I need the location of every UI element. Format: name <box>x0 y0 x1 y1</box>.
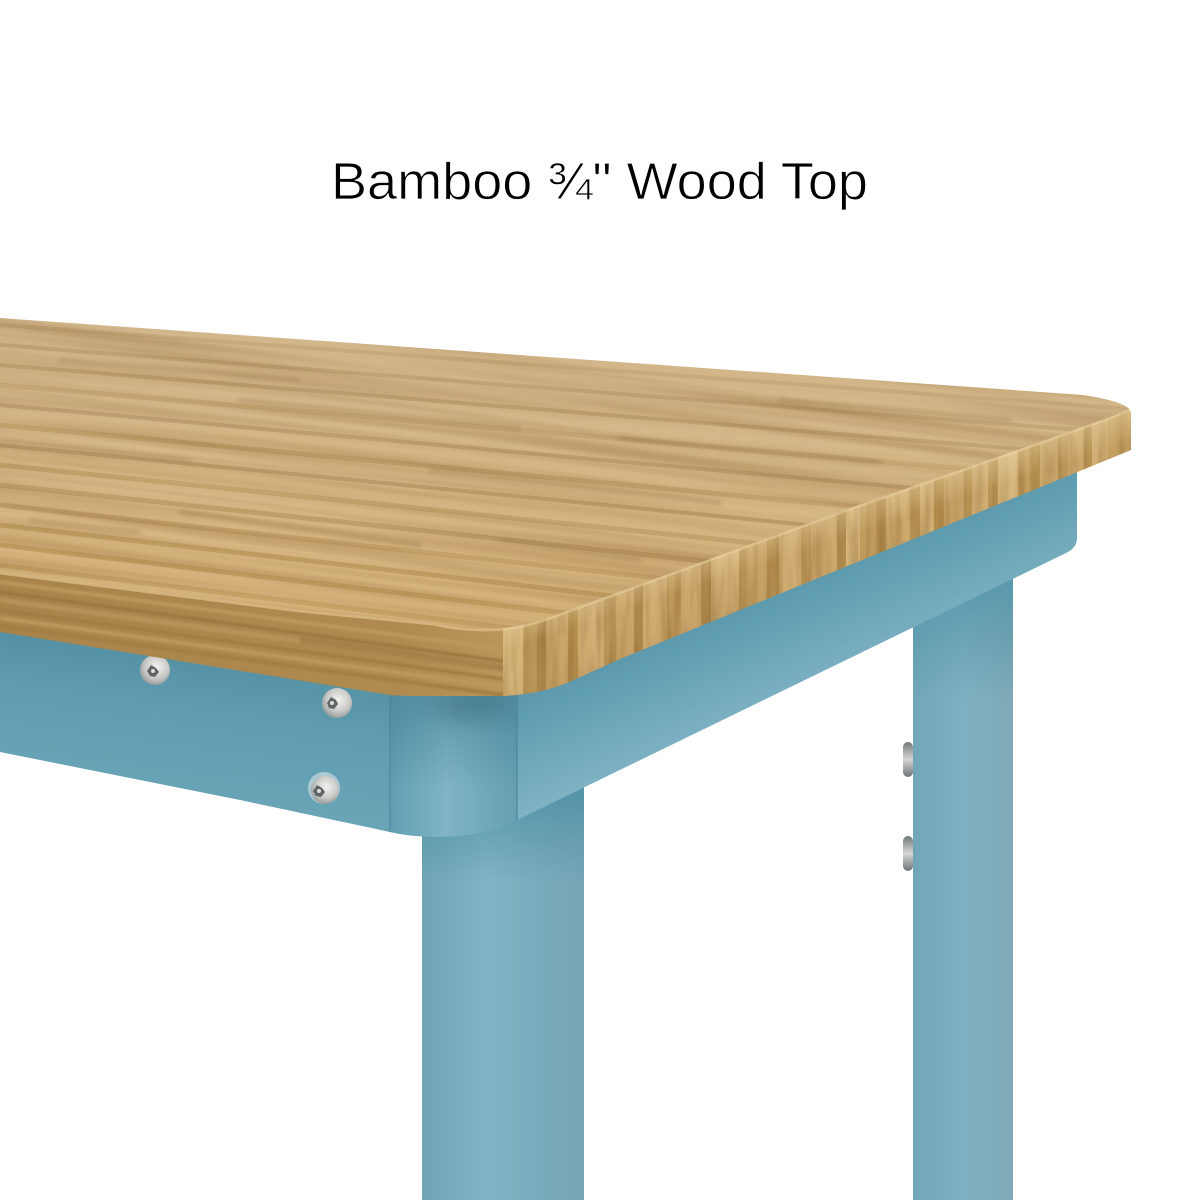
top surface with grain <box>0 318 1129 629</box>
bolt 3 <box>308 772 340 804</box>
rounded apron corner bracket <box>390 690 517 837</box>
top short side face <box>500 400 1140 700</box>
bamboo top <box>0 318 1131 696</box>
front leg <box>422 770 584 1200</box>
back leg adjustment bolts <box>903 742 913 871</box>
back leg <box>903 560 1013 1200</box>
top long side face <box>0 572 503 696</box>
darker grain streaks <box>0 360 1010 560</box>
bolts on long apron <box>140 655 352 804</box>
bolt 2 <box>322 688 352 718</box>
short side apron <box>517 470 1077 820</box>
bolt 1 <box>140 655 170 685</box>
long side apron <box>0 620 390 832</box>
title: Bamboo ¾" Wood Top <box>331 153 868 211</box>
